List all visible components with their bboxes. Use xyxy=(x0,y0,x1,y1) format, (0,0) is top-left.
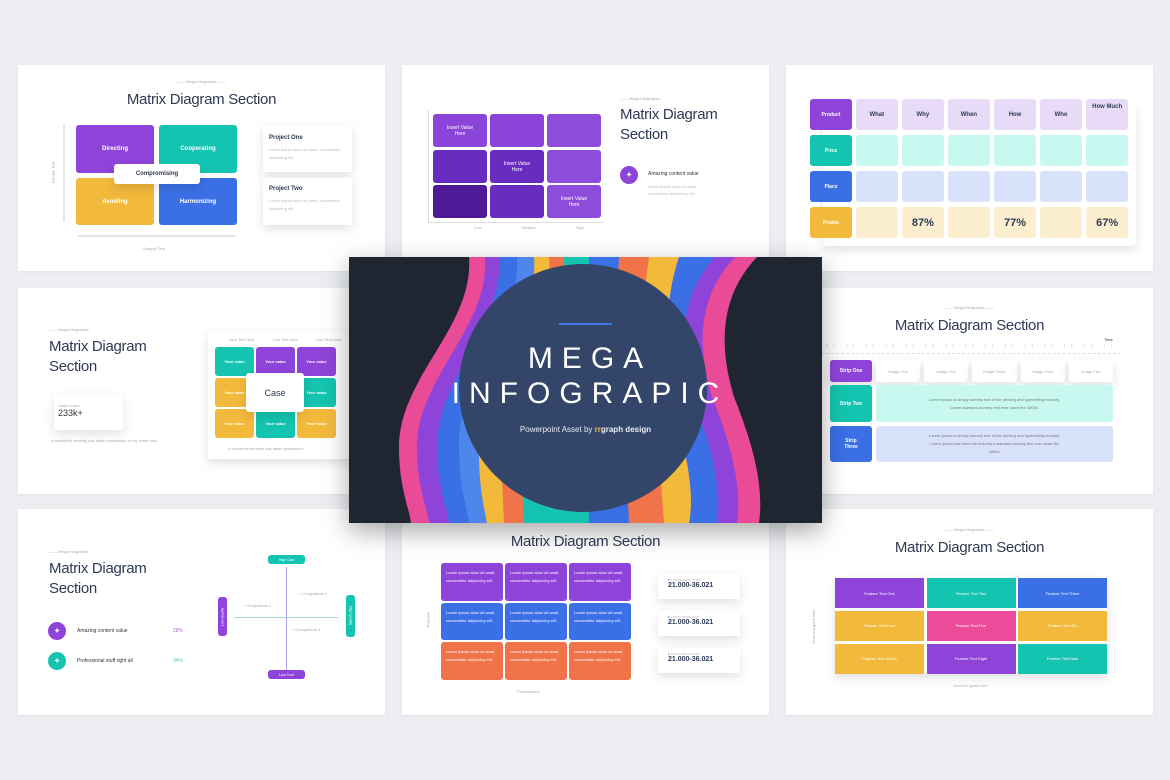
slide 8: performance matrix xyxy=(402,509,769,715)
axis labels: Low xyxy=(474,225,481,230)
quadrant diagram: • Competitors 1 xyxy=(300,591,327,596)
heatmap grid: Here xyxy=(512,166,522,172)
heatmap grid: Here xyxy=(455,130,465,136)
title xyxy=(49,560,146,597)
title: Section xyxy=(49,580,97,597)
stat card: Case in here xyxy=(58,403,81,408)
card: project two: Project Two xyxy=(269,186,303,192)
grid xyxy=(441,563,631,680)
matrix card: Your Text here xyxy=(272,337,298,342)
item 2 xyxy=(48,652,183,670)
slide 6: strips: Image Five xyxy=(1081,368,1101,374)
slide 8: performance matrix: ♦ Lorem ipsum dolor xyxy=(668,652,700,656)
slide 3: table matrix: Price xyxy=(825,148,837,154)
row labels: Product xyxy=(822,112,840,118)
slide 6: strips: 1500s. xyxy=(988,449,1000,454)
quadrant: cooperating: Cooperating xyxy=(180,146,216,152)
matrix card xyxy=(208,332,358,459)
grid: Lorem ipsum dolor sit amet, consectetur adipiscing elit. xyxy=(446,649,495,662)
compromising box: Compromising xyxy=(136,171,178,177)
slide 3: table matrix: Place xyxy=(824,184,838,190)
header: —— Mega Infographic xyxy=(620,96,660,101)
slide 6: strips: Image Two xyxy=(937,368,956,374)
card: project two xyxy=(263,178,352,225)
axis labels xyxy=(474,225,584,230)
quadrant diagram: High Quality xyxy=(348,606,352,626)
title: Matrix Diagram Section xyxy=(127,91,276,108)
quadrant diagram: Low Quality xyxy=(220,607,224,626)
title xyxy=(49,338,146,375)
place row xyxy=(856,171,1128,202)
icon: pin xyxy=(620,166,638,184)
grid: Feature Text Two xyxy=(956,591,986,596)
grid: Feature Text Four xyxy=(864,623,895,628)
item 1 xyxy=(48,622,183,640)
stat card: 233k+ xyxy=(58,408,83,418)
slide 6: strips xyxy=(786,288,1153,494)
header: —— Mega Infographic —— xyxy=(945,305,994,310)
quadrant: harmonizing xyxy=(159,178,237,225)
axis label bottom: Sample Text xyxy=(143,246,165,251)
title: Matrix Diagram Section xyxy=(511,533,660,550)
slide 3: table matrix: Promo xyxy=(823,220,839,226)
grid: Lorem ipsum dolor sit amet, consectetur adipiscing elit. xyxy=(446,570,495,583)
y label: Potential xyxy=(425,612,430,627)
vertical axis xyxy=(63,125,65,222)
quadrant: avoiding: Avoiding xyxy=(102,198,128,204)
matrix card: Your value xyxy=(224,390,245,395)
grid: Lorem ipsum dolor sit amet, consectetur adipiscing elit. xyxy=(574,570,623,583)
left bands xyxy=(399,257,589,523)
matrix card: Your value xyxy=(306,359,327,364)
heatmap grid: Insert Value xyxy=(447,124,473,130)
text: amazing content: Lorem ipsum dolor sit amet, xyxy=(648,184,697,189)
strip one xyxy=(830,360,872,382)
axis labels: Medium xyxy=(521,225,536,230)
matrix card: Your value xyxy=(224,359,245,364)
slide 6: strips: Lorem Ipsum is simply dummy text of the printing and typesetting industry. xyxy=(929,396,1060,402)
right bands xyxy=(589,257,760,523)
time ruler xyxy=(786,344,1121,354)
slide 8: performance matrix: 21.000-36.021 xyxy=(668,656,713,663)
promo row with percentages: 67% xyxy=(1096,216,1118,228)
quadrant diagram xyxy=(218,555,355,679)
grid: Feature Text Nine xyxy=(1047,656,1078,661)
heatmap grid: Insert Value xyxy=(504,160,530,166)
title: Matrix Diagram Section xyxy=(895,317,1044,334)
header row: When xyxy=(961,112,977,118)
header row: How xyxy=(1009,112,1021,118)
case box: Case xyxy=(264,388,286,398)
item 1: ✦ xyxy=(54,628,60,635)
header row: Who xyxy=(1055,112,1068,118)
card: project one xyxy=(263,125,352,172)
title: Matrix Diagram xyxy=(49,560,146,577)
slide 4: case matrix xyxy=(18,288,385,494)
header: —— Mega Infographic xyxy=(49,327,89,332)
slide 9: feature matrix xyxy=(786,509,1153,715)
x label: Performance xyxy=(517,689,540,694)
promo row with percentages: 87% xyxy=(912,216,934,228)
slide 6: strips: Lorem Ipsum is simply dummy text of the printing and typesetting industry. xyxy=(929,433,1060,438)
title: Matrix Diagram xyxy=(49,338,146,355)
value cards xyxy=(658,574,740,599)
slide 2: purple heatmap xyxy=(402,65,769,271)
strip two: Strip Two xyxy=(840,400,862,406)
y label: Your text goes here xyxy=(811,609,816,644)
card: project one: Project One xyxy=(269,135,303,141)
matrix card: Your value xyxy=(306,421,327,426)
value cards: ♦ Lorem ipsum dolor xyxy=(668,578,700,582)
text: amazing content xyxy=(648,171,699,196)
header row xyxy=(856,99,1128,130)
strip three xyxy=(830,426,872,462)
hero title xyxy=(452,342,728,410)
table card xyxy=(823,105,1136,246)
subtitle: Powerpoint Asset by rrgraph design xyxy=(520,425,651,434)
quadrant diagram: High Cost xyxy=(279,558,294,562)
header: —— Mega Infographic xyxy=(49,549,89,554)
header row: What xyxy=(869,112,884,118)
header row: How Much xyxy=(1092,104,1122,110)
grid: Lorem ipsum dolor sit amet, consectetur adipiscing elit. xyxy=(510,610,559,623)
grid: Lorem ipsum dolor sit amet, consectetur adipiscing elit. xyxy=(574,610,623,623)
matrix card: Your value xyxy=(265,421,286,426)
slide 8: performance matrix: ♦ Lorem ipsum dolor xyxy=(668,615,700,619)
strip three: Strip xyxy=(845,438,857,444)
strip three: Three xyxy=(844,444,858,450)
slide 8: performance matrix: 21.000-36.021 xyxy=(668,619,713,626)
grid: Feature Text Eight xyxy=(955,656,987,661)
grid: Lorem ipsum dolor sit amet, consectetur adipiscing elit. xyxy=(510,649,559,662)
axis labels: High xyxy=(576,225,584,230)
quadrant diagram: • Competitors 2 xyxy=(244,603,271,608)
price row xyxy=(856,135,1128,166)
grid: Lorem ipsum dolor sit amet, consectetur adipiscing elit. xyxy=(574,649,623,662)
row labels xyxy=(810,99,852,130)
grid: Lorem ipsum dolor sit amet, consectetur adipiscing elit. xyxy=(446,610,495,623)
grid: Feature Text Five xyxy=(956,623,986,628)
slide 7: competitor quadrant xyxy=(18,509,385,715)
slide 6: strips: Image Four xyxy=(1032,368,1053,374)
slide 6: strips: Image One xyxy=(888,368,908,374)
promo row with percentages: 77% xyxy=(1004,216,1026,228)
value cards: 21.000-36.021 xyxy=(668,582,713,589)
grid: Lorem ipsum dolor sit amet, consectetur adipiscing elit. xyxy=(510,570,559,583)
grid: Feature Text Three xyxy=(1046,591,1079,596)
axis label left: Sample Text xyxy=(50,162,55,183)
slide 1: matrix with projects xyxy=(18,65,385,271)
header: —— Mega Infographic —— xyxy=(177,79,226,84)
case box xyxy=(246,373,304,412)
quadrant: avoiding xyxy=(76,178,154,225)
wave bands xyxy=(399,257,760,523)
strip one: Strip One xyxy=(840,368,862,374)
y axis xyxy=(428,110,429,222)
text: amazing content: Amazing content value xyxy=(648,171,699,177)
grid: Feature Text Six xyxy=(1048,623,1077,628)
matrix card: Your value xyxy=(224,421,245,426)
title: Section xyxy=(49,358,97,375)
matrix card: A wonderful serenity has taken possession xyxy=(228,446,304,451)
heatmap grid xyxy=(433,114,601,218)
slide 6: strips: Image Three xyxy=(983,368,1006,374)
card: project one: Lorem ipsum dolor sit amet, consectetur adipiscing elit. xyxy=(269,147,340,160)
quadrant: directing: Directing xyxy=(102,146,128,152)
item 2: Professional stuff right all xyxy=(77,658,133,664)
slide 3: table matrix xyxy=(786,65,1153,271)
quadrant diagram: • Competitors 3 xyxy=(293,627,320,632)
grid: Feature Text One xyxy=(864,591,895,596)
matrix card: Your value xyxy=(306,390,327,395)
accent line xyxy=(559,323,612,325)
card: project two: Lorem ipsum dolor sit amet, consectetur adipiscing elit. xyxy=(269,198,340,211)
icon: pin: ✦ xyxy=(626,172,632,179)
title xyxy=(620,106,717,143)
title: Matrix Diagram Section xyxy=(895,539,1044,556)
heatmap grid: Here xyxy=(569,202,579,208)
title: Section xyxy=(620,126,668,143)
hero title: INFOGRAPIC xyxy=(452,377,728,410)
quadrant: harmonizing: Harmonizing xyxy=(180,198,216,204)
item 1: Amazing content value xyxy=(77,628,128,634)
heatmap grid: Insert Value xyxy=(561,196,587,202)
horizontal axis xyxy=(78,235,236,237)
item 2: 34% xyxy=(173,658,183,664)
quadrant diagram: Low Cost xyxy=(279,672,294,676)
header row: Why xyxy=(917,112,929,118)
promo row with percentages xyxy=(856,207,1128,238)
header: —— Mega Infographic —— xyxy=(945,527,994,532)
stat card xyxy=(54,394,123,430)
x axis xyxy=(428,222,604,223)
item 2: ✦ xyxy=(54,658,60,665)
circle xyxy=(459,264,707,512)
grid: Feature Text Seven xyxy=(862,656,897,661)
grid xyxy=(835,578,1107,674)
matrix card: Your Text here xyxy=(229,337,254,342)
text: amazing content: consectetur adipiscing elit. xyxy=(648,191,695,196)
slide 6: strips: Time xyxy=(1104,337,1113,342)
title: Matrix Diagram xyxy=(620,106,717,123)
compromising box xyxy=(114,164,200,184)
quadrant: cooperating xyxy=(159,125,237,173)
strip two xyxy=(830,385,872,422)
x label: Your text goes here xyxy=(953,683,988,688)
item 1: 28% xyxy=(173,628,183,634)
slide 6: strips: Lorem Ipsum has been the industry's standard dummy text ever since the xyxy=(930,441,1059,446)
center hero slide xyxy=(349,257,822,523)
matrix card: Your Text here xyxy=(316,337,341,342)
hero title: MEGA xyxy=(528,342,652,375)
quadrant: directing xyxy=(76,125,154,173)
description: A wonderful serenity has taken possession of my entire soul xyxy=(51,438,157,443)
slide 6: strips: Lorem standard dummy text ever since the 1500s. xyxy=(950,404,1039,410)
matrix card: Your value xyxy=(265,359,286,364)
